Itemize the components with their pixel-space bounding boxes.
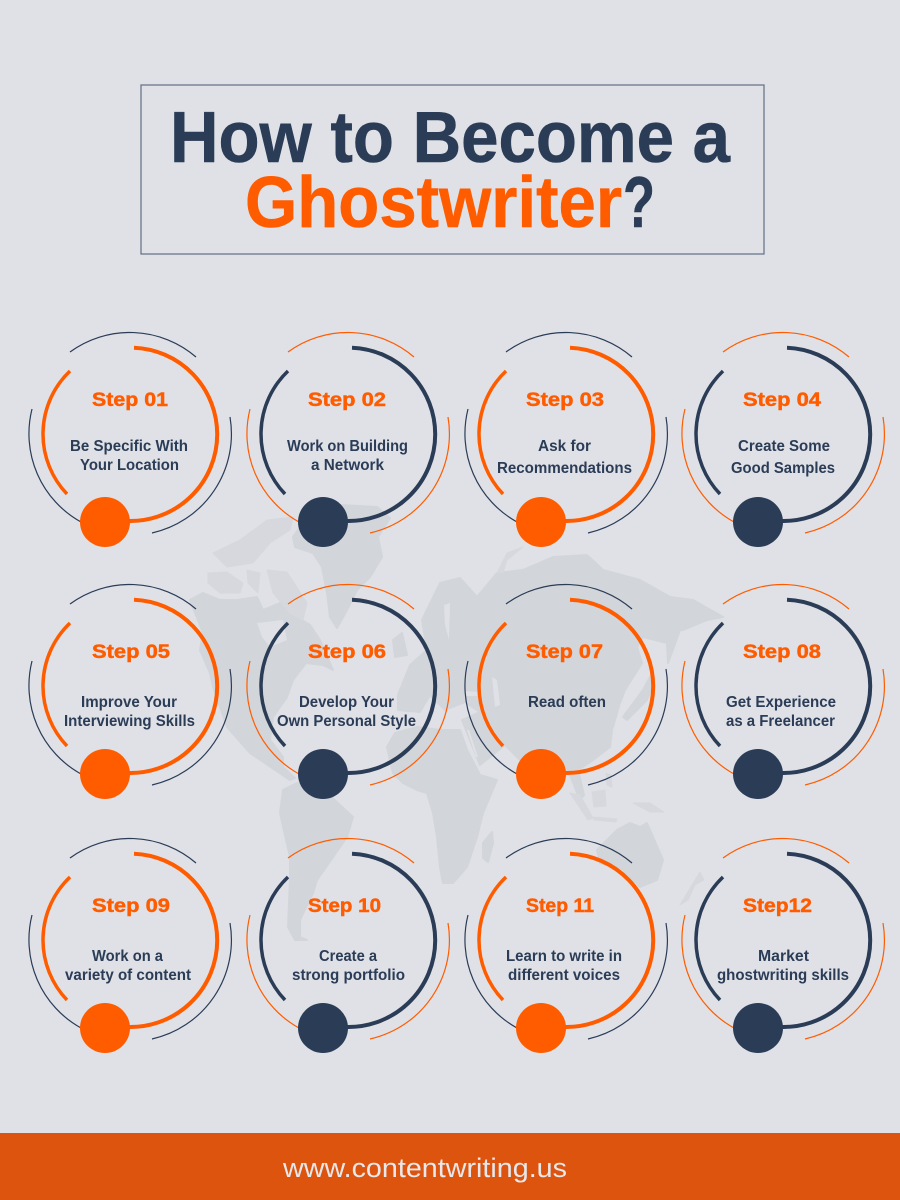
step 12: ghostwriting skills [717,967,849,984]
step 02: a Network [311,457,384,474]
title: Ghostwriter [245,163,622,243]
footer url: www.contentwriting.us [282,1153,567,1183]
step 03: Step 03 [526,390,604,411]
step 01: Your Location [80,457,179,474]
step 02: Work on Building [287,438,408,455]
step 05: Improve Your [81,694,177,711]
step 02: Step 02 [308,390,386,411]
step 07: Step 07 [526,642,603,663]
title: ? [623,163,655,243]
step 04: Good Samples [731,460,835,477]
footer band [0,1133,900,1200]
step 07 [465,584,667,799]
title: How to Become a [170,98,731,178]
step 05: Step 05 [92,642,170,663]
step 03: Recommendations [497,460,632,477]
step 01: Step 01 [92,390,168,411]
step 08: Step 08 [743,642,821,663]
step 09: variety of content [65,967,191,984]
step 06: Own Personal Style [277,713,416,730]
step 05: Interviewing Skills [64,713,195,730]
step 12: Step12 [743,896,812,917]
step 03: Ask for [538,438,591,455]
title box [141,85,764,254]
step 10 [247,838,449,1053]
step 10: Create a [319,948,377,965]
title [170,98,731,243]
step 04: Create Some [738,438,830,455]
step 06: Step 06 [308,642,386,663]
step 11: different voices [508,967,620,984]
step 01: Be Specific With [70,438,188,455]
step 08 [682,584,884,799]
step 04: Step 04 [743,390,821,411]
step 06: Develop Your [299,694,394,711]
step 09: Step 09 [92,896,170,917]
step 08: as a Freelancer [726,713,835,730]
step 10: strong portfolio [292,967,405,984]
step 10: Step 10 [308,896,381,917]
step 07: Read often [528,694,606,711]
background world map [190,505,723,940]
step 12: Market [758,948,809,965]
step 02 [247,332,449,547]
step 05 [29,584,231,799]
step 12 [682,838,884,1053]
step 04 [682,332,884,547]
step 11: Learn to write in [506,948,622,965]
step 11 [465,838,667,1053]
step 01 [29,332,231,547]
step 09: Work on a [92,948,163,965]
step 11: Step 11 [526,896,594,917]
step 09 [29,838,231,1053]
step 03 [465,332,667,547]
step 08: Get Experience [726,694,836,711]
step 06 [247,584,449,799]
